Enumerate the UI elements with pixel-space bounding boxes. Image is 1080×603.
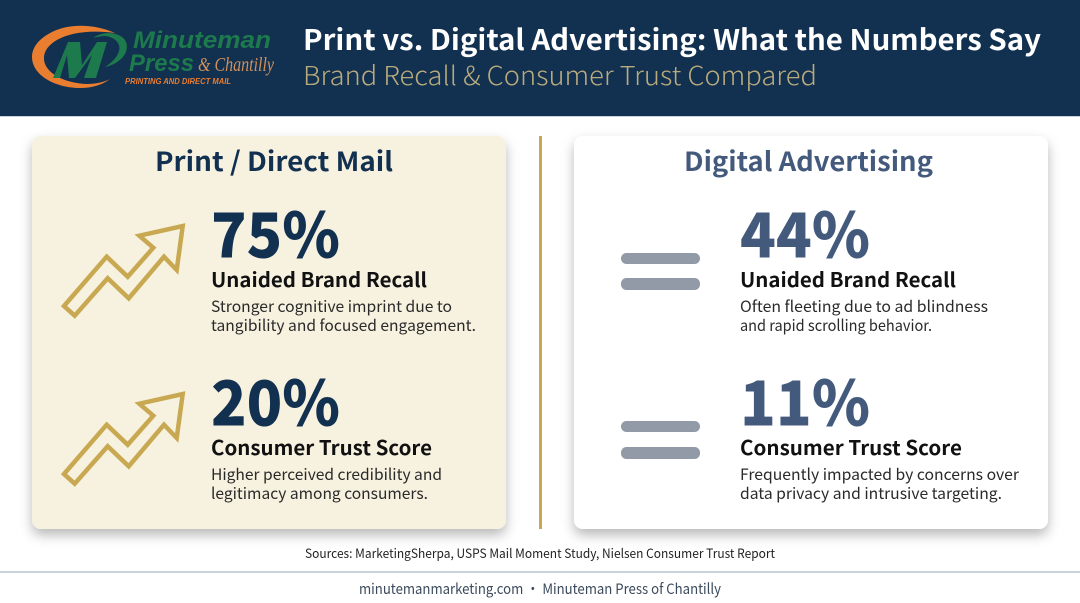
description: recall digital: and rapid scrolling behavior. [740,314,932,336]
label: unaided brand recall: Unaided Brand Recall [211,264,427,293]
center divider [539,136,542,529]
icon: rising arrow [64,394,183,484]
description: trust digital [740,463,1020,504]
description: recall print [211,295,476,336]
description: trust print: legitimacy among consumers. [211,482,428,504]
stat: 11%: 11% [740,354,870,444]
panel heading: digital: Digital Advertising [684,140,933,179]
description: recall print: Stronger cognitive imprint due to [211,295,452,317]
sources: Sources: MarketingSherpa, USPS Mail Moment Study, Nielsen Consumer Trust Report [305,543,775,562]
description: recall digital [740,295,988,336]
description: recall print: tangibility and focused engagement. [211,314,476,336]
label: consumer trust score: Consumer Trust Score [211,432,432,461]
panel: digital advertising [574,136,1048,529]
panel heading: print: Print / Direct Mail [155,140,393,179]
description: trust digital: data privacy and intrusive targeting. [740,482,1002,504]
footer rule [0,571,1080,573]
description: trust print [211,463,442,504]
logo tagline: PRINTING AND DIRECT MAIL [125,77,231,86]
logo: Minuteman Press of Chantilly [32,26,274,88]
icon: equals [621,421,700,459]
logo wordmark: Minuteman [133,27,271,54]
logo swoosh [32,26,115,88]
icon: rising arrow [64,226,183,316]
logo letters MP [53,33,127,78]
label: consumer trust score: Consumer Trust Score [740,432,962,461]
stat: 44%: 44% [740,186,870,276]
stat: 20%: 20% [211,354,340,444]
logo wordmark second line: Press [129,50,194,77]
title: Print vs. Digital Advertising: What the Numbers Say [303,18,1041,59]
icon: equals [621,253,700,290]
header band [0,0,1080,117]
subtitle: Brand Recall & Consumer Trust Compared [303,56,817,93]
logo script: & Chantilly [198,54,274,76]
description: trust print: Higher perceived credibility and [211,463,442,485]
description: recall digital: Often fleeting due to ad blindness [740,295,988,317]
stat: 75%: 75% [211,186,340,276]
panel: print / direct mail [32,136,506,529]
description: trust digital: Frequently impacted by concerns over [740,463,1020,485]
footer text: minutemanmarketing.com · Minuteman Press of Chantilly [359,578,721,599]
label: unaided brand recall: Unaided Brand Recall [740,264,956,293]
